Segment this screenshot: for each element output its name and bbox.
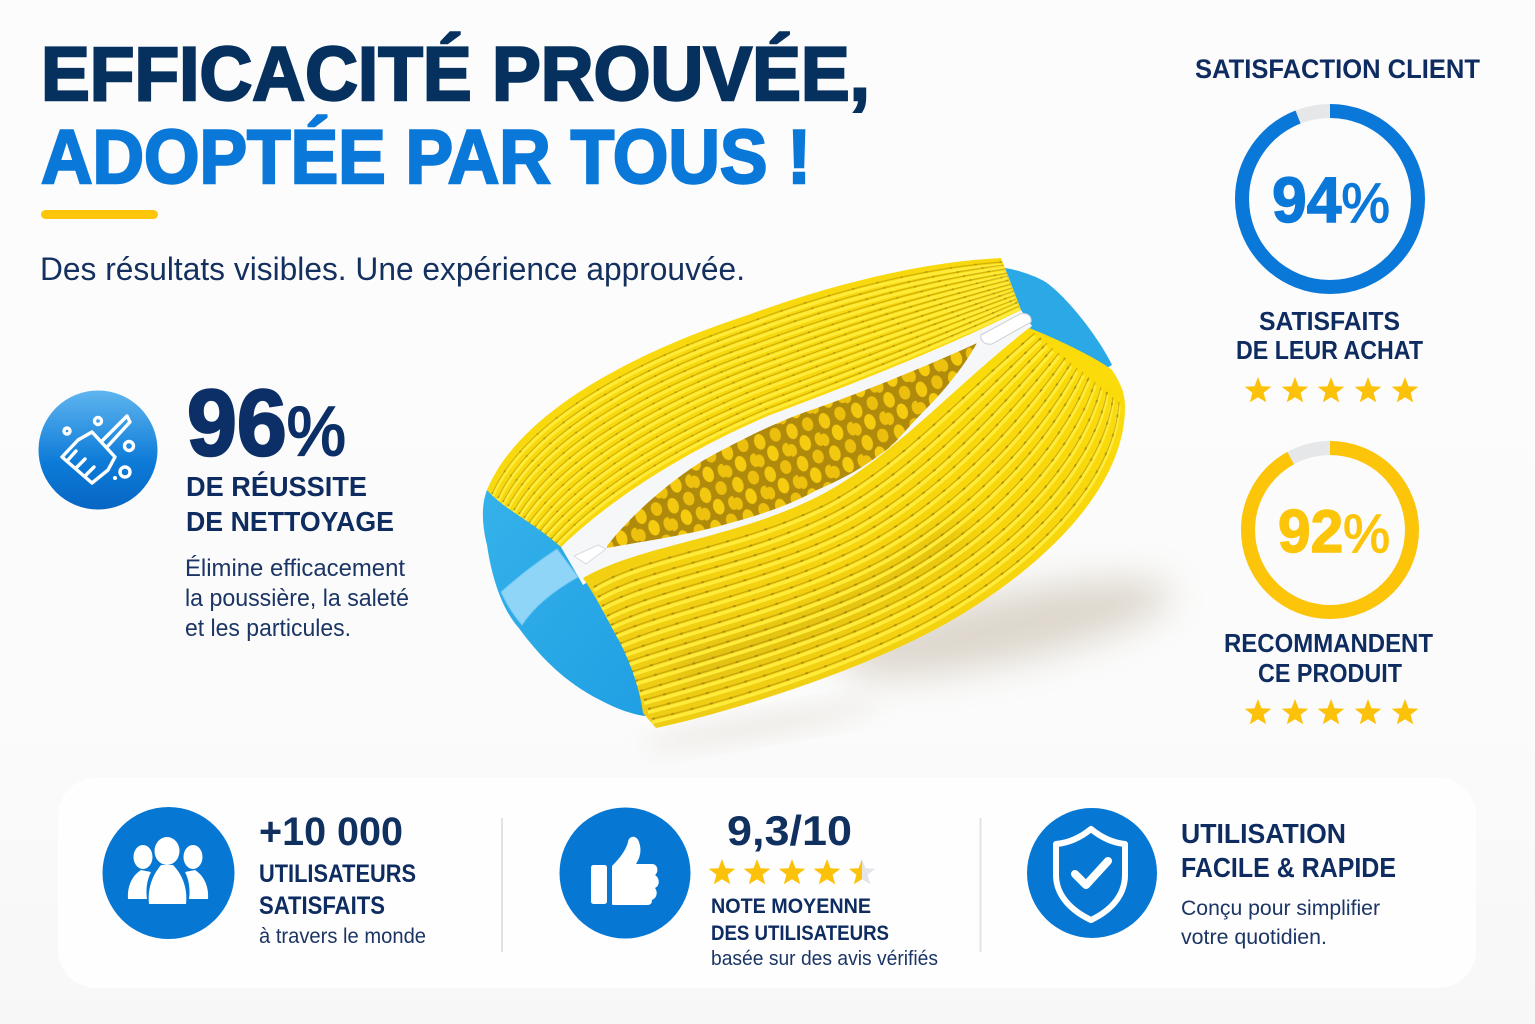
donut chart: 94% (1242, 111, 1418, 287)
stat description: et les particules. (185, 615, 351, 642)
stat heading: DE NETTOYAGE (186, 506, 394, 537)
rating text: DES UTILISATEURS (711, 921, 889, 945)
label: recommend (1224, 628, 1433, 688)
donut chart: 92%: 92% (1278, 498, 1390, 565)
stat heading: DE RÉUSSITE (186, 471, 367, 502)
ease text: votre quotidien. (1181, 926, 1327, 949)
users text: UTILISATEURS (259, 860, 416, 888)
icon: users (102, 807, 234, 939)
rating text (711, 894, 938, 970)
users text (259, 810, 426, 948)
stat: rating (560, 807, 938, 970)
rating text: basée sur des avis vérifiés (711, 948, 938, 970)
blue mesh end, left (483, 490, 660, 716)
stat: ease of use (1027, 808, 1396, 949)
title (41, 32, 870, 200)
ease text (1181, 818, 1396, 949)
panel: customer satisfaction (1195, 54, 1480, 724)
title: EFFICACITÉ PROUVÉE, (41, 32, 870, 117)
stat description: la poussière, la saleté (185, 585, 409, 612)
stat description (185, 555, 409, 642)
label: satisfied: DE LEUR ACHAT (1236, 335, 1423, 365)
stat block: 96% cleaning success (38, 370, 409, 642)
stars rating (1245, 699, 1418, 724)
label: satisfied: SATISFAITS (1259, 306, 1400, 336)
ease text: Conçu pour simplifier (1181, 897, 1380, 920)
score: 9,3/10 (727, 807, 852, 854)
icon: broom in blue circle (38, 390, 158, 510)
stars rating (1245, 377, 1418, 402)
interior bristles (607, 343, 977, 548)
panel heading: SATISFACTION CLIENT (1195, 54, 1480, 84)
zipper slider, left (574, 545, 606, 564)
big number 96%: 96% (187, 370, 346, 475)
title: ADOPTÉE PAR TOUS ! (41, 115, 811, 200)
stat description: Élimine efficacement (185, 555, 405, 582)
users text: à travers le monde (259, 925, 426, 948)
ease text: UTILISATION (1181, 818, 1346, 849)
ease text: FACILE & RAPIDE (1181, 852, 1396, 883)
donut chart: 94%: 94% (1272, 164, 1390, 236)
blue strap (501, 549, 578, 625)
zipper tape (561, 310, 1032, 585)
icon: shield check (1027, 808, 1157, 938)
zipper slider, right (981, 313, 1031, 344)
rating text: NOTE MOYENNE (711, 894, 871, 918)
yellow fabric, lower half (583, 328, 1125, 728)
panel: bottom stats (58, 778, 1476, 988)
product: yellow zippered cleaning pouch (483, 258, 1178, 757)
label: satisfied (1236, 306, 1423, 365)
stars 4.5 of 5 (709, 859, 875, 884)
donut chart: 92% (1248, 448, 1412, 612)
users text: +10 000 (259, 810, 403, 854)
product shadow (640, 559, 1178, 757)
users text: SATISFAITS (259, 892, 385, 920)
title accent bar (41, 210, 158, 219)
stat heading (186, 471, 394, 537)
yellow fabric, upper half (487, 258, 1021, 547)
blue mesh end, right (1005, 268, 1112, 372)
label: recommend: CE PRODUIT (1258, 658, 1402, 688)
icon: thumbs up (560, 808, 690, 938)
stat: users (102, 807, 426, 948)
subtitle: Des résultats visibles. Une expérience approuvée. (40, 251, 745, 287)
label: recommend: RECOMMANDENT (1224, 628, 1433, 658)
